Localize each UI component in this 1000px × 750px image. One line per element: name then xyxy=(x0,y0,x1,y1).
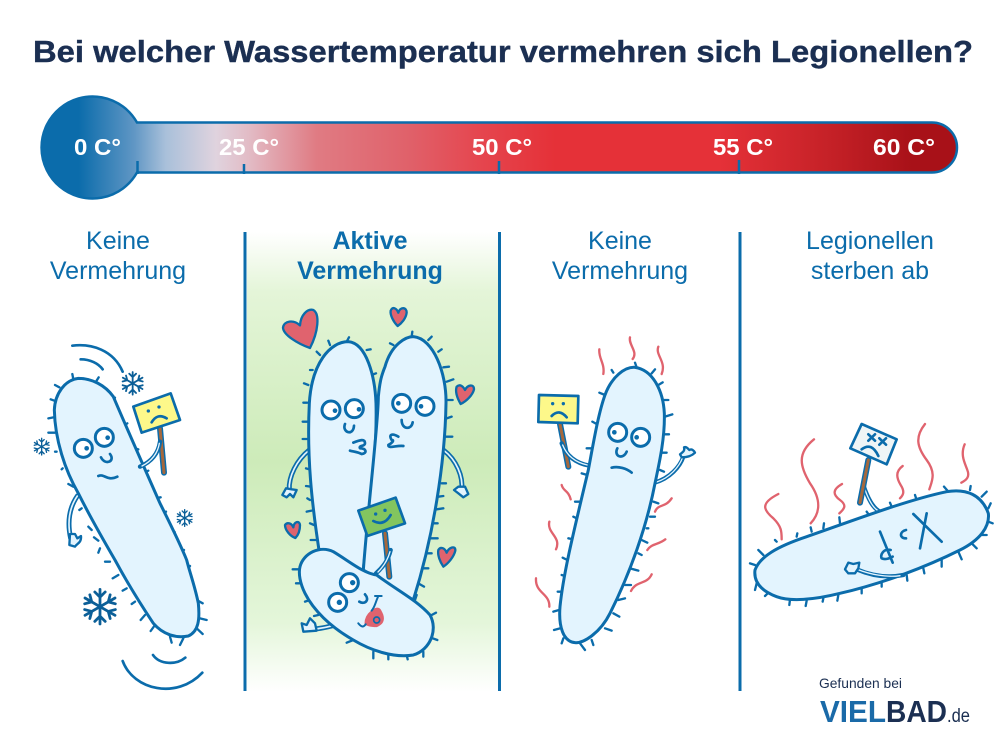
hairs xyxy=(553,363,672,650)
logo wordmark .de: .de xyxy=(947,706,970,727)
logo: Gefunden bei VIELBAD.de xyxy=(819,675,970,729)
body xyxy=(560,367,664,643)
hairs xyxy=(293,332,453,659)
column heading: Keine Vermehrung (cold): Vermehrung xyxy=(50,257,186,285)
left body xyxy=(309,342,376,570)
illustration: warm bacterium xyxy=(536,337,695,650)
sign with sad face xyxy=(133,393,180,473)
front face xyxy=(329,574,383,627)
panel: green highlight for active reproduction xyxy=(247,232,498,692)
right arm with hand xyxy=(654,447,695,483)
shiver lines xyxy=(72,345,202,689)
illustration: loving bacteria xyxy=(282,308,474,659)
column heading: Aktive Vermehrung: Vermehrung xyxy=(297,257,443,285)
thermometer scale xyxy=(42,97,957,199)
column heading: Legionellen sterben ab: sterben ab xyxy=(811,257,929,285)
label 60 C: 60 C° xyxy=(873,134,935,160)
column heading: Aktive Vermehrung: Aktive xyxy=(332,227,408,255)
label 50 C: 50 C° xyxy=(472,134,532,160)
column dividers xyxy=(245,232,740,691)
label 25 C: 25 C° xyxy=(219,134,279,160)
logo wordmark VIEL: VIEL xyxy=(820,694,886,729)
column heading: Keine Vermehrung (warm): Vermehrung xyxy=(552,257,688,285)
body xyxy=(54,378,199,637)
hairs xyxy=(48,374,207,645)
dead face xyxy=(880,513,942,563)
face xyxy=(74,428,117,478)
body xyxy=(755,491,989,600)
heat lines xyxy=(765,424,968,539)
illustration: dying bacterium xyxy=(750,424,993,606)
column heading: Keine Vermehrung (warm): Keine xyxy=(588,227,652,255)
faces xyxy=(322,394,434,454)
label 0 C: 0 C° xyxy=(74,134,121,160)
right body xyxy=(363,337,446,600)
logo caption: Gefunden bei xyxy=(819,675,902,691)
column heading: Keine Vermehrung (cold): Keine xyxy=(86,227,150,255)
logo wordmark BAD: BAD xyxy=(886,694,947,729)
sign with dead face xyxy=(850,424,897,512)
label 55 C: 55 C° xyxy=(713,134,773,160)
sign with happy face xyxy=(358,498,405,577)
arms with hands xyxy=(282,450,468,632)
front body xyxy=(299,549,433,656)
arm with hand xyxy=(69,496,81,547)
snowflakes xyxy=(33,372,193,624)
sign with sad face xyxy=(538,395,589,467)
heat lines xyxy=(536,337,672,607)
hairs xyxy=(750,486,993,606)
thermometer body xyxy=(42,97,957,199)
illustration: freezing bacterium xyxy=(33,345,207,689)
tick marks xyxy=(138,160,739,174)
column heading: Legionellen sterben ab: Legionellen xyxy=(806,227,934,255)
hearts xyxy=(283,308,474,567)
face xyxy=(609,423,650,473)
arm across body with hand xyxy=(845,563,903,576)
title: Bei welcher Wassertemperatur vermehren sich Legionellen? xyxy=(33,34,973,69)
